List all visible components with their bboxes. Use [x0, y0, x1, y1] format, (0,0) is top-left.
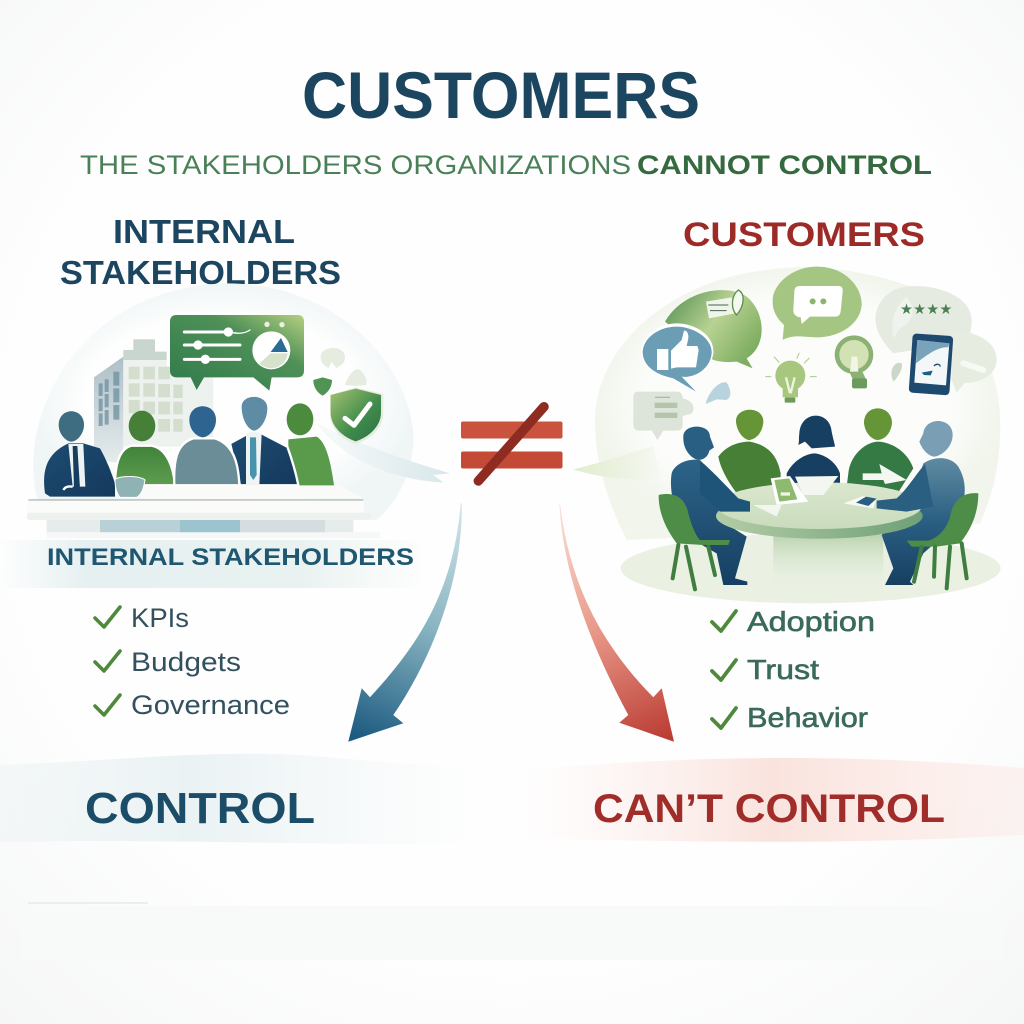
tag band: internal stakeholders: [0, 540, 430, 588]
tag band: internal stakeholders: INTERNAL STAKEHOLDERS: [47, 544, 414, 571]
halo with tail pointing to the not-equal sign: [595, 267, 1000, 540]
Trust item: Trust: [747, 654, 819, 685]
KPIs item: [95, 603, 189, 633]
review bubble with stars: ★★★★: [900, 302, 953, 318]
Budgets item: Budgets: [131, 647, 241, 677]
heading: customers: CUSTOMERS: [683, 216, 925, 254]
small faint shapes: [706, 363, 902, 404]
Adoption item: [712, 606, 875, 637]
arrow: internal stakeholders to control: [348, 503, 462, 742]
Behavior item: Behavior: [747, 702, 868, 733]
conference table: [27, 486, 380, 538]
chat bubble: [773, 267, 862, 340]
shield with check: [330, 387, 383, 444]
front right arm and chair: [877, 464, 978, 588]
Governance item: Governance: [131, 690, 290, 720]
Trust item: [712, 654, 819, 685]
arrow: customers to can't control: [559, 503, 674, 742]
outcome band: control: CONTROL: [85, 784, 315, 833]
list: customer outcomes: [712, 606, 875, 733]
outcome band: can't control: CAN’T CONTROL: [593, 787, 945, 831]
Budgets item: [95, 647, 241, 677]
title: CUSTOMERS: [302, 58, 700, 132]
Adoption item: Adoption: [747, 606, 875, 637]
lightbulb small: [765, 353, 817, 403]
illustration: customers round table: [573, 267, 1001, 603]
back row people: [718, 408, 913, 495]
heading: internal stakeholders: [60, 213, 341, 291]
heading: internal stakeholders: STAKEHOLDERS: [60, 254, 341, 291]
speech bubble dashboard: [170, 315, 304, 391]
outcome band: control: [0, 754, 480, 844]
subtitle: CANNOT CONTROL: [637, 150, 932, 180]
tablet: [909, 333, 953, 395]
list: internal controls: [95, 603, 290, 720]
front left person torso and legs: [671, 427, 747, 585]
subtitle: THE STAKEHOLDERS ORGANIZATIONS: [80, 150, 631, 180]
round table: [716, 476, 923, 539]
Behavior item: [712, 702, 868, 733]
note bubble: [633, 392, 694, 440]
review bubble with stars: [875, 286, 997, 393]
people row: [44, 397, 334, 497]
KPIs item: KPIs: [131, 603, 189, 633]
not-equal sign: [461, 407, 562, 481]
front left arm and chair: [659, 461, 750, 589]
building: [94, 339, 213, 463]
coffee cup: [115, 477, 145, 497]
small faint icons: [313, 348, 367, 396]
like bubble: [641, 290, 762, 393]
front right person torso and legs: [882, 421, 965, 585]
heading: internal stakeholders: INTERNAL: [113, 213, 295, 250]
illustration: internal stakeholders meeting: [27, 283, 450, 538]
lightbulb large: [835, 335, 873, 388]
outcome band: can't control: [520, 758, 1024, 842]
halo with tail pointing to the not-equal sign: [33, 283, 413, 520]
